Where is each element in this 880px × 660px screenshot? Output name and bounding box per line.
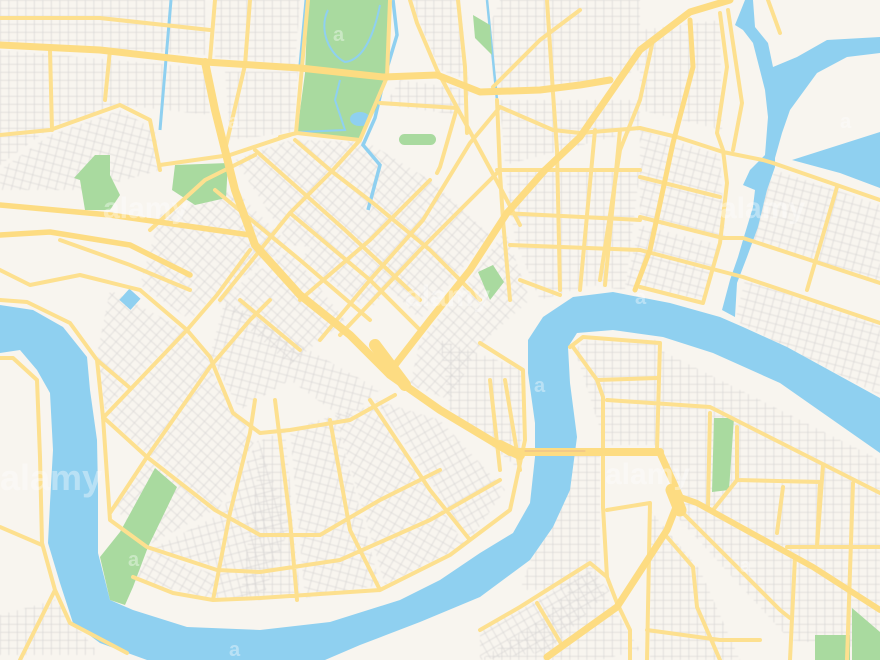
park: west green — [74, 155, 120, 210]
highway: northeast expressway — [395, 0, 730, 365]
watermark: alamy: alamy — [720, 192, 805, 225]
park: city park — [297, 0, 390, 140]
watermark: a: a — [228, 111, 240, 133]
park: lower right — [815, 608, 880, 660]
highway: south — [547, 453, 680, 657]
watermark: a: a — [534, 375, 546, 397]
watermark: a: a — [635, 287, 647, 309]
watermark: a: a — [840, 111, 852, 133]
highway: diagonal to bridge — [205, 62, 660, 452]
watermark: alamy: alamy — [0, 457, 102, 498]
park: top strip — [473, 15, 492, 55]
highway: southeast — [680, 497, 880, 610]
park: algiers strip — [712, 418, 734, 492]
watermark: alamy: alamy — [605, 458, 690, 491]
watermark: a: a — [740, 555, 752, 577]
park water features — [119, 5, 380, 310]
highway: west approach — [0, 205, 250, 275]
park: audubon — [100, 468, 177, 605]
lake — [792, 132, 880, 188]
highway: east spur — [635, 20, 693, 290]
watermark: a: a — [333, 24, 345, 46]
park: downtown — [478, 265, 504, 300]
watermark: alamy: alamy — [103, 192, 188, 225]
narrow drainage canals — [160, 0, 497, 210]
watermark: a: a — [128, 549, 140, 571]
industrial canal and harbour — [722, 0, 880, 317]
highway: east-west expressway — [0, 45, 610, 92]
park: green square — [172, 163, 228, 205]
watermark: alamy: alamy — [405, 280, 490, 313]
park: oval — [399, 134, 436, 145]
river — [0, 292, 880, 660]
